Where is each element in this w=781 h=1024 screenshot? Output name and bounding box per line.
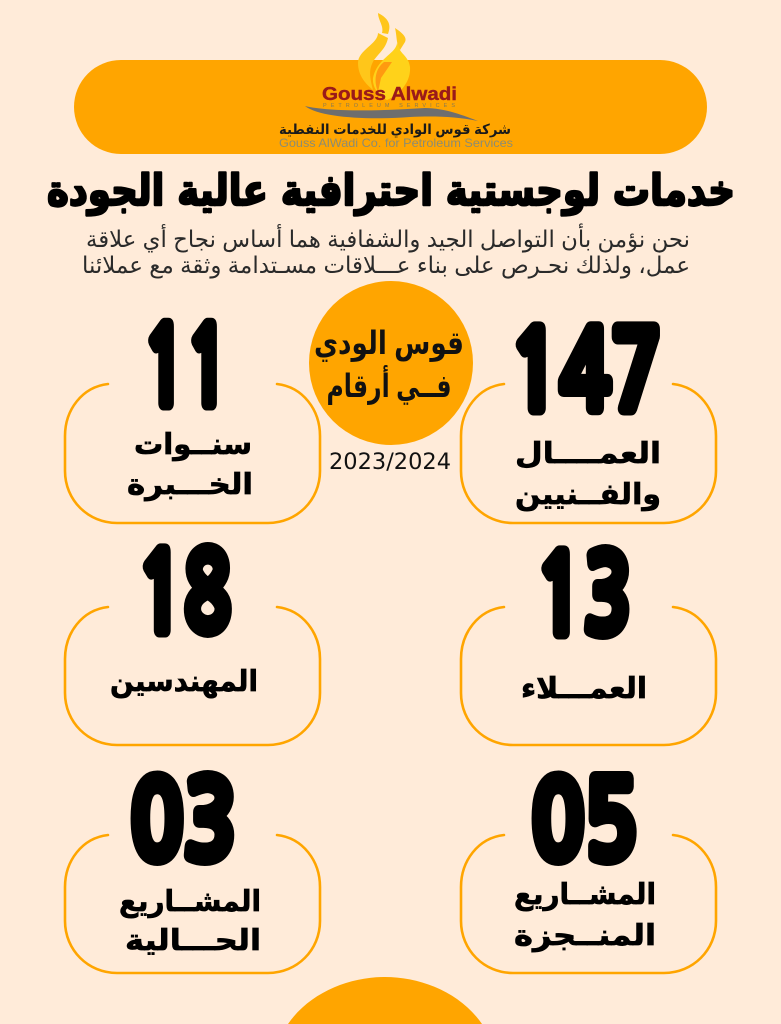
number 18: 18 — [137, 541, 231, 648]
circle heading: فــي أرقام — [326, 365, 452, 405]
intro text: عمل، ولذلك نحـرص على بناء عـــلاقات مسـتدامة وثقة مع عملائنا — [82, 252, 690, 279]
panel: engineers — [65, 541, 320, 745]
label: المشــاريع — [119, 884, 261, 918]
label: المهندسين — [110, 664, 258, 698]
label: المشــاريع — [514, 877, 656, 911]
label — [119, 884, 261, 957]
label: سنــوات — [134, 427, 252, 461]
logo english name: Gouss AlWadi Co. for Petroleum Services — [279, 136, 513, 150]
circle heading: قوس الودي — [314, 325, 464, 362]
label — [514, 877, 656, 952]
label — [515, 436, 661, 511]
number 147: 147 — [510, 319, 662, 426]
label: المنــجزة — [514, 918, 656, 952]
label: الخـــبرة — [127, 467, 253, 501]
bottom circle — [288, 977, 482, 1024]
year: 2023/2024 — [329, 450, 451, 475]
panel: completed projects — [461, 769, 716, 973]
panel: clients — [461, 543, 716, 745]
panel: years of experience — [65, 315, 320, 523]
panel: workers and technicians — [461, 319, 716, 523]
logo name: Gouss Alwadi — [322, 84, 457, 104]
circle heading — [314, 325, 464, 405]
label — [127, 427, 253, 501]
intro text: نحن نؤمن بأن التواصل الجيد والشفافية هما أساس نجاح أي علاقة — [86, 223, 690, 253]
header banner — [74, 60, 707, 154]
panel: current projects — [65, 769, 320, 973]
logo arabic name: شركة قوس الوادي للخدمات النفطية — [279, 121, 511, 139]
logo — [279, 13, 513, 150]
number 13: 13 — [536, 543, 632, 650]
logo tagline: PETROLEUM SERVICES — [323, 103, 455, 109]
number 03: 03 — [130, 769, 236, 876]
icon: flame — [358, 13, 410, 100]
number 05: 05 — [532, 769, 638, 876]
center circle — [309, 281, 473, 445]
label: والفــنيين — [515, 477, 661, 511]
intro text — [82, 223, 690, 279]
label: العمــــال — [515, 436, 661, 470]
logo swoosh — [305, 106, 478, 121]
label: الحـــالية — [125, 923, 261, 957]
label: العمـــلاء — [521, 671, 647, 705]
number 11: 11 — [143, 315, 229, 420]
